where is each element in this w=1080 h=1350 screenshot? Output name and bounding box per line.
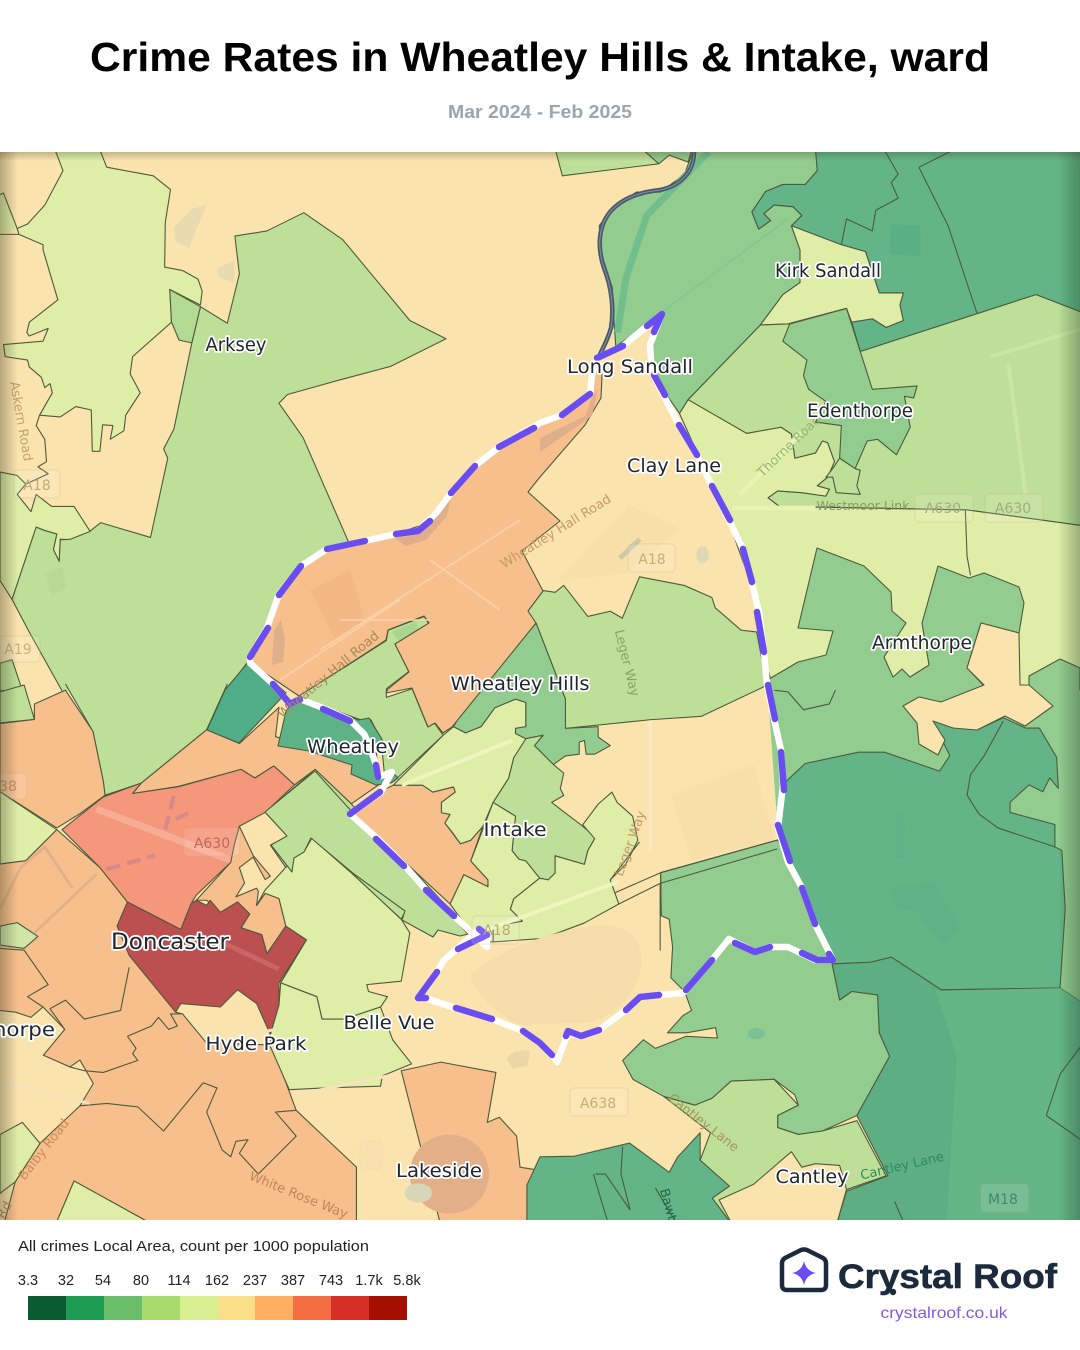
icon: house with star <box>782 1250 826 1290</box>
place names: Clay Lane <box>627 455 721 477</box>
place names: Belle Vue <box>344 1012 434 1034</box>
road name labels: Wheatley Hall Road <box>275 629 382 722</box>
logo: Crystal Roof <box>782 1250 1058 1322</box>
teal wedge area <box>207 660 286 743</box>
place names: Long Sandall <box>567 356 693 378</box>
legend colour bar <box>28 1296 407 1320</box>
legend scale values: 114 <box>167 1273 191 1289</box>
legend scale values: 237 <box>243 1273 267 1289</box>
keyhole tail of the y <box>890 1289 896 1295</box>
place names <box>0 260 972 1188</box>
legend scale values: 743 <box>319 1273 343 1289</box>
legend scale values: 54 <box>95 1273 111 1289</box>
legend title: All crimes Local Area, count per 1000 population <box>18 1239 369 1255</box>
road name labels: Askern Road <box>6 380 35 463</box>
road number shields <box>0 470 1043 1212</box>
legend scale values: 1.7k <box>355 1273 383 1289</box>
road name labels: Leger Way <box>611 628 642 698</box>
road number shields: A19 <box>4 642 32 658</box>
map areas: south-west and Doncaster centre <box>0 684 541 1226</box>
road name labels: Wheatley Hall Road <box>498 492 614 572</box>
road name labels: Cantley Lane <box>859 1150 945 1183</box>
green strip south-west of the ward <box>265 771 468 937</box>
road name labels: Cantley Lane <box>665 1091 741 1155</box>
Armthorpe cream area <box>903 623 1053 755</box>
website address: crystalroof.co.uk <box>880 1305 1009 1322</box>
road name labels: Balby Road <box>16 1116 73 1183</box>
legend <box>18 1239 421 1320</box>
place names: Wheatley Hills <box>450 673 590 695</box>
map areas: north-east <box>555 150 1080 691</box>
place names: Intake <box>484 819 546 841</box>
legend scale values: 80 <box>133 1273 149 1289</box>
map areas: south-east <box>527 685 1080 1226</box>
place names: Arksey <box>206 334 266 356</box>
place names: Armthorpe <box>872 632 972 654</box>
road name labels: Thorne Road <box>754 413 824 481</box>
road number shields: A18 <box>483 923 511 939</box>
river <box>598 152 694 358</box>
place names: Lakeside <box>396 1160 482 1182</box>
road name labels: Leger Way <box>612 809 650 879</box>
road number shields: A18 <box>638 552 666 568</box>
place names: Hyde Park <box>206 1033 306 1055</box>
green area east of Armthorpe <box>1029 659 1080 690</box>
map areas: north-west <box>0 150 446 691</box>
map areas: Wheatley Hills and Intake centre <box>299 577 777 950</box>
legend scale values: 387 <box>281 1273 305 1289</box>
legend scale values: 162 <box>205 1273 229 1289</box>
legend scale values: 32 <box>58 1273 74 1289</box>
ward boundary: purple dashes <box>250 314 833 1055</box>
ward boundary: white casing <box>250 314 833 1062</box>
road number shields: A18 <box>23 478 51 494</box>
place names: Edenthorpe <box>807 400 913 422</box>
wordmark: Crystal Roof <box>838 1258 1058 1296</box>
place names: Kirk Sandall <box>775 260 881 282</box>
Wheatley dark green area <box>278 697 398 785</box>
legend scale values <box>18 1273 421 1289</box>
legend scale values: 5.8k <box>393 1273 421 1289</box>
road number shields: A630 <box>995 501 1031 517</box>
legend scale values: 3.3 <box>18 1273 38 1289</box>
place names: Cantley <box>776 1166 848 1188</box>
road number shields: A630 <box>194 836 230 852</box>
road name labels: Westmoor Link <box>817 498 910 513</box>
road number shields: A630 <box>925 501 961 517</box>
place names: Wheatley <box>307 736 399 758</box>
Armthorpe green parcels <box>769 548 1024 690</box>
subtitle: date range: Mar 2024 - Feb 2025 <box>448 101 632 122</box>
edge shadow on the map <box>0 152 1080 1220</box>
road number shields: A638 <box>580 1096 616 1112</box>
map areas: orange Wheatley Park area and Armthorpe <box>207 152 1080 1025</box>
soft oval in the racecourse area <box>536 931 564 940</box>
road name labels <box>0 380 945 1235</box>
place names: Doncaster <box>111 930 230 955</box>
road name labels: White Rose Way <box>247 1169 350 1222</box>
road number shields: M18 <box>988 1192 1018 1208</box>
title: Crime Rates in Wheatley Hills & Intake, ward <box>90 34 990 80</box>
road name labels: Bawtry <box>656 1187 683 1235</box>
